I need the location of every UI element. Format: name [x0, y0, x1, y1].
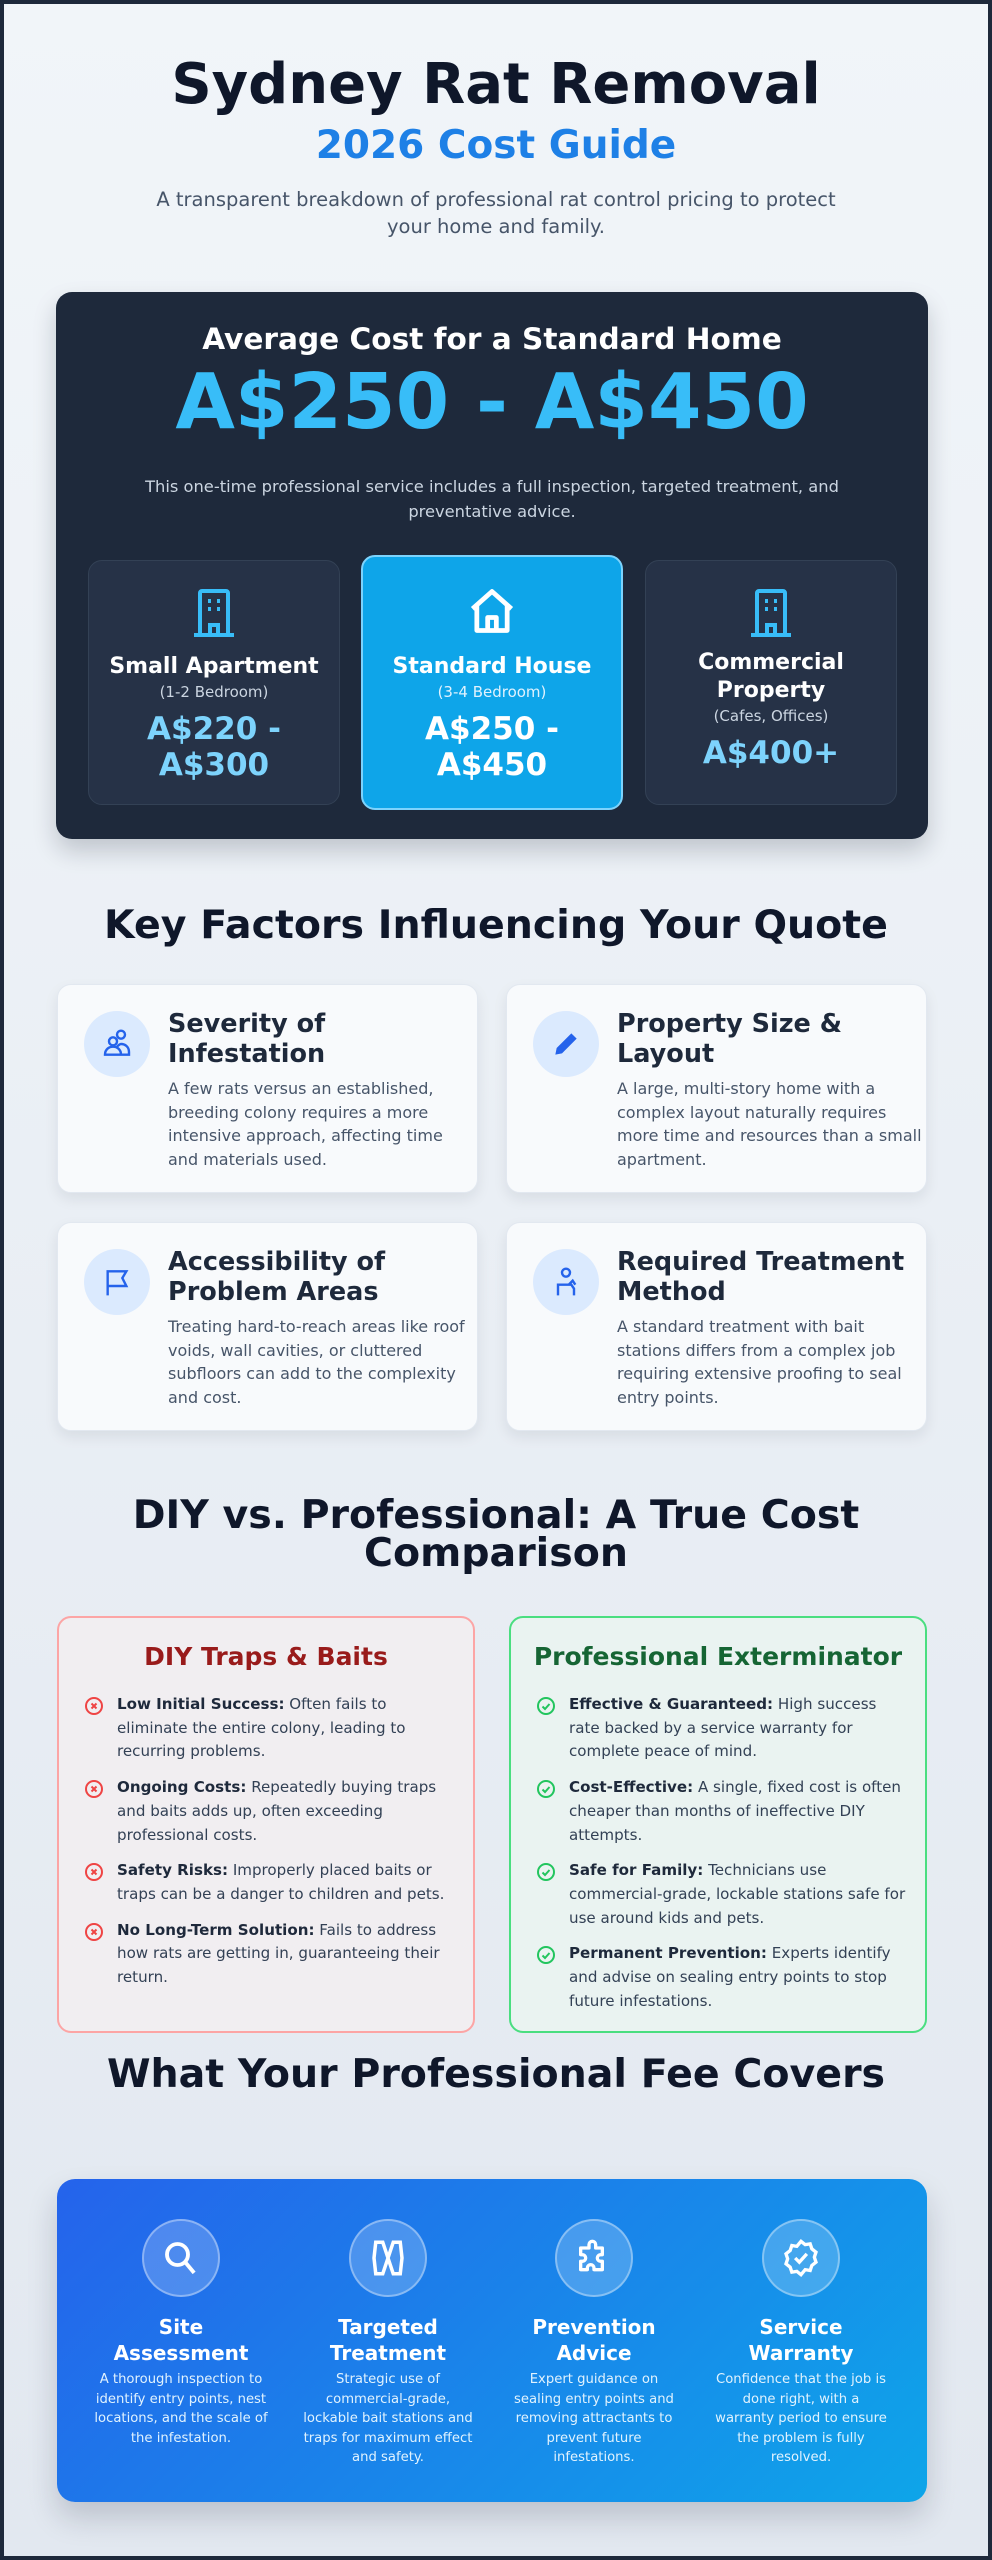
item: prevention: Permanent Prevention: Experts identify and advise on sealing entry points to stop future infestations.	[569, 1944, 891, 2010]
panel: professional: Professional Exterminator	[534, 1642, 902, 1671]
subtitle: 2026 Cost Guide: 2026 Cost Guide	[316, 123, 676, 168]
tier: small apartment: A$300	[159, 747, 269, 783]
service: prevention advice: Advice	[556, 2341, 632, 2365]
tier: standard house: (3-4 Bedroom)	[438, 683, 546, 701]
tier: small apartment: (1-2 Bedroom)	[160, 683, 268, 701]
service: site assessment: A thorough inspection to identify entry points, nest locations, and the scale of the infestation.	[94, 2372, 268, 2446]
intro text: A transparent breakdown of professional rat control pricing to protect your home and family.	[156, 188, 836, 238]
tier: commercial: (Cafes, Offices)	[714, 707, 828, 725]
item: safety risks: Safety Risks: Improperly placed baits or traps can be a danger to children and pets.	[117, 1861, 444, 1903]
tier: commercial: Property	[717, 678, 825, 703]
tier: standard house: Standard House	[393, 654, 591, 679]
tier: small apartment: Small Apartment	[109, 654, 319, 679]
service: prevention advice	[514, 2219, 674, 2465]
heading: comparison: DIY vs. Professional: A True Cost Comparison	[133, 1492, 859, 1576]
title: Sydney Rat Removal	[171, 52, 821, 117]
tier: small apartment: A$220 -	[147, 711, 281, 747]
tier: standard house: A$450	[437, 747, 547, 783]
service: warranty: Service	[759, 2315, 843, 2339]
icon: pencil	[533, 1011, 599, 1077]
service: warranty: Confidence that the job is done right, with a warranty period to ensure the problem is fully resolved.	[715, 2372, 887, 2465]
panel: services	[57, 2179, 927, 2502]
tier: small apartment	[88, 560, 340, 805]
service: warranty	[715, 2219, 887, 2465]
panel: severity: Severity of Infestation	[168, 1009, 325, 1069]
icon: house	[471, 589, 513, 633]
panel: severity: A few rats versus an established, breeding colony requires a more intensive approach, affecting time and materials used.	[168, 1079, 443, 1168]
heading: key factors: Key Factors Influencing Your Quote	[104, 902, 888, 948]
tier: standard house: A$250 -	[425, 711, 559, 747]
tier: standard house	[361, 555, 623, 810]
tier: commercial: A$400+	[703, 735, 839, 771]
panel: severity	[57, 984, 478, 1193]
service: prevention advice: Prevention	[532, 2315, 656, 2339]
tier: commercial: Commercial	[698, 650, 844, 675]
service: site assessment: Assessment	[114, 2341, 248, 2365]
panel: DIY	[57, 1616, 475, 2033]
panel: treatment method: A standard treatment with bait stations differs from a complex job requiring extensive proofing to seal entry points.	[617, 1317, 902, 1406]
item: safe for family: Safe for Family: Technicians use commercial-grade, lockable stations safe for use around kids and pets.	[569, 1861, 905, 1927]
panel: DIY: DIY Traps & Baits	[144, 1642, 388, 1671]
icon: flag	[84, 1249, 150, 1315]
item: effective: Effective & Guaranteed: High success rate backed by a service warranty for complete peace of mind.	[569, 1695, 876, 1760]
panel: average cost	[56, 292, 928, 839]
tier: commercial	[645, 560, 897, 805]
heading: average cost: Average Cost for a Standard Home	[202, 322, 782, 356]
item: no long-term: No Long-Term Solution: Fails to address how rats are getting in, guaranteeing their return.	[117, 1921, 440, 1986]
description: This one-time professional service includes a full inspection, targeted treatment, and preventative advice.	[145, 477, 839, 521]
panel: professional	[509, 1616, 927, 2033]
item: cost-effective: Cost-Effective: A single, fixed cost is often cheaper than months of ineffective DIY attempts.	[569, 1778, 901, 1844]
panel: property size: A large, multi-story home with a complex layout naturally requires more time and resources than a small apartment.	[617, 1079, 922, 1168]
big price: A$250 - A$450	[175, 358, 809, 447]
service: warranty: Warranty	[749, 2341, 853, 2365]
panel: treatment method: Required Treatment Method	[617, 1247, 904, 1307]
service: targeted treatment: Targeted	[338, 2315, 438, 2339]
item: ongoing costs: Ongoing Costs: Repeatedly buying traps and baits adds up, often exceeding professional costs.	[117, 1778, 436, 1844]
panel: accessibility	[57, 1222, 478, 1431]
icon: building	[194, 589, 234, 637]
item: low initial success: Low Initial Success: Often fails to eliminate the entire colony, leading to recurring problems.	[117, 1695, 406, 1760]
panel: property size: Property Size & Layout	[617, 1009, 842, 1069]
service: site assessment: Site	[159, 2315, 203, 2339]
icon: person	[533, 1249, 599, 1315]
service: site assessment	[94, 2219, 268, 2446]
service: targeted treatment: Treatment	[330, 2341, 446, 2365]
panel: treatment method	[506, 1222, 927, 1431]
panel: accessibility: Treating hard-to-reach areas like roof voids, wall cavities, or cluttered subfloors can add to the complexity and cost.	[168, 1317, 465, 1406]
icon: users	[84, 1011, 150, 1077]
panel: accessibility: Accessibility of Problem Areas	[168, 1247, 385, 1307]
heading: fee covers: What Your Professional Fee Covers	[107, 2051, 885, 2097]
service: targeted treatment: Strategic use of commercial-grade, lockable bait stations and traps for maximum effect and safety.	[303, 2372, 473, 2465]
panel: property size	[506, 984, 927, 1193]
service: targeted treatment	[303, 2219, 473, 2465]
service: prevention advice: Expert guidance on sealing entry points and removing attractants to prevent future infestations.	[514, 2372, 674, 2465]
icon: building	[751, 589, 791, 637]
